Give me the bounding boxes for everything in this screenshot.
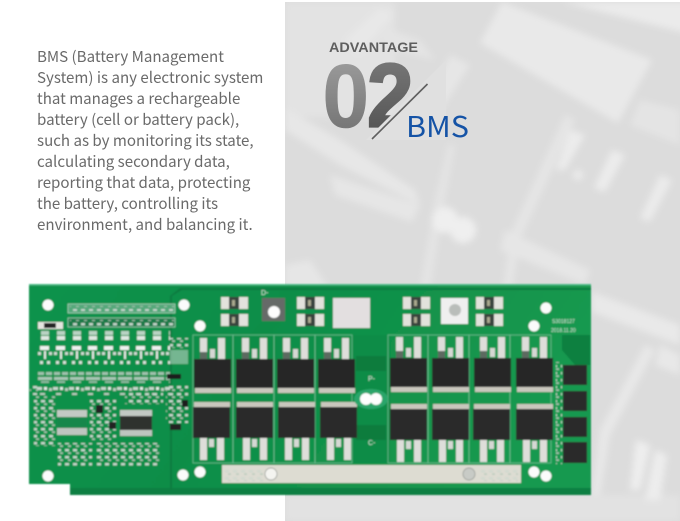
mounting holes [42,300,552,482]
body text paragraph: that manages a rechargeable [37,87,240,109]
top pads and switch: 2018.11.20 [551,328,576,334]
background panel: blurred circuit board photo [285,2,680,521]
cut through numeral 2 [366,60,446,140]
IC chips [57,410,152,436]
body text paragraph: the battery, controlling its [37,192,218,214]
body text paragraph: calculating secondary data, [37,150,230,172]
body text paragraph: reporting that data, protecting [37,171,250,193]
right side connectors [556,362,587,464]
circuit board photo [29,284,591,495]
body text paragraph: environment, and balancing it. [37,213,253,235]
top pads and switch [221,290,576,334]
MOSFET cell outlines [193,335,551,463]
MOSFETs left group [193,338,357,460]
P- and C- terminals: P- [368,376,376,383]
small components left [30,328,188,466]
body text paragraph [37,45,263,235]
numeral: 2: 2 [367,46,414,146]
MOSFETs right group [390,337,553,462]
number badge: ADVANTAGE 02 / BMS [322,40,469,147]
top pads and switch: S3018127 [552,319,575,325]
connector headers top left [38,304,175,329]
diagonal slash [372,84,428,139]
silver strip and holes at bottom [222,465,521,483]
top pads and switch: D- [261,290,269,297]
P- and C- terminals [354,376,388,447]
body text paragraph: System) is any electronic system [37,66,263,88]
body text paragraph: BMS (Battery Management [37,45,224,67]
body text paragraph: battery (cell or battery pack), [37,108,239,130]
label: ADVANTAGE: ADVANTAGE [329,40,418,55]
board outline [29,284,591,495]
body text paragraph: such as by monitoring its state, [37,129,254,151]
P- and C- terminals: C- [368,440,376,447]
label: BMS: BMS [406,105,469,146]
numeral: 0: 0 [322,46,369,147]
